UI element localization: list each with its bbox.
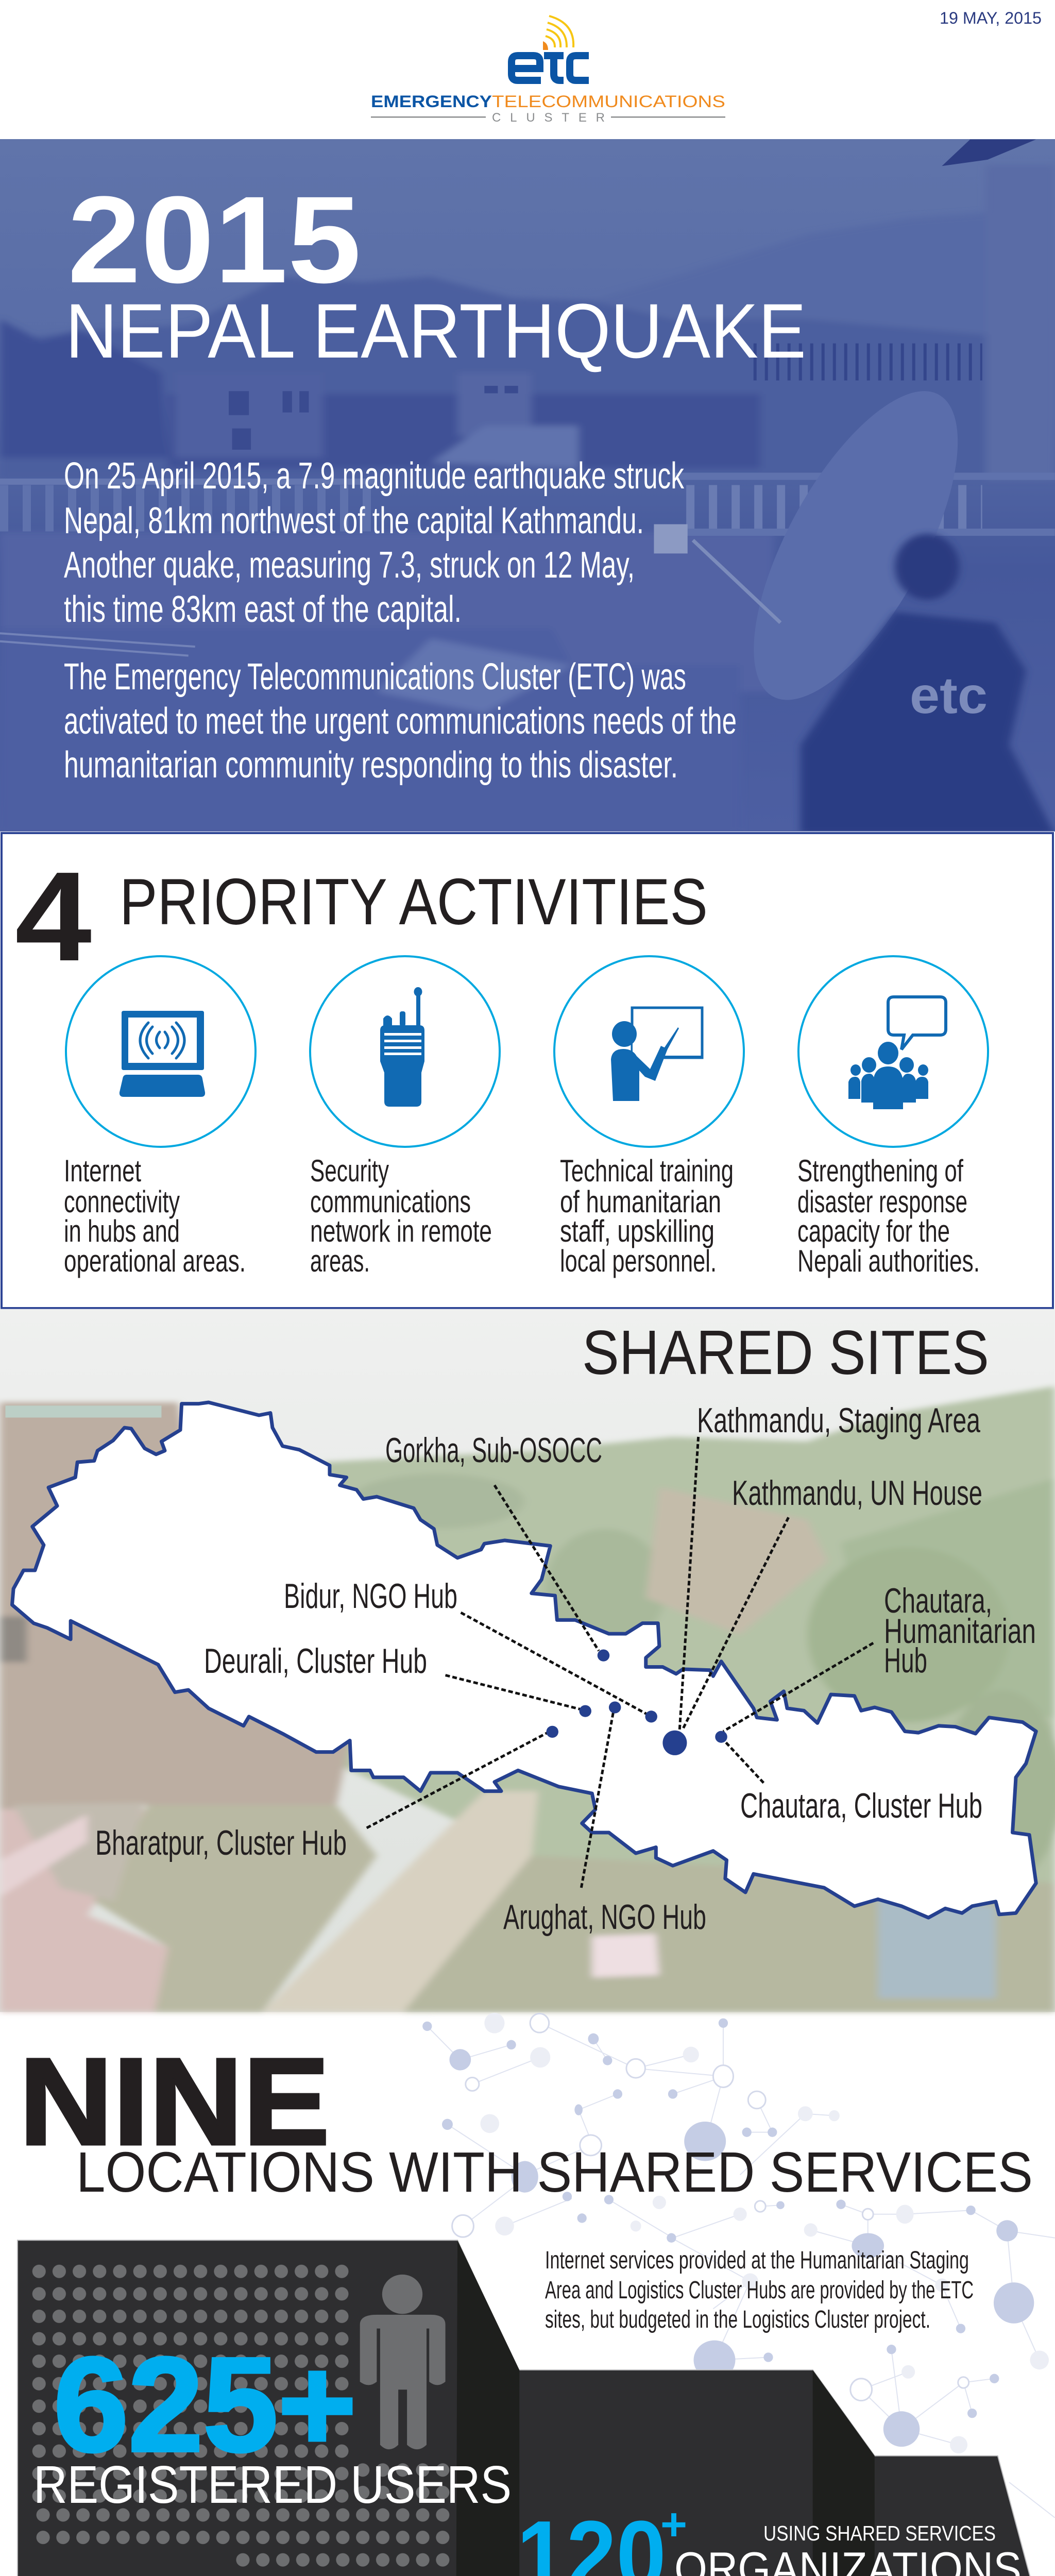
caption: connectivity bbox=[64, 1184, 180, 1219]
hero title: Nepal Earthquake: NEPAL EARTHQUAKE bbox=[65, 287, 806, 374]
hero text: ETC activation: The Emergency Telecommunications Cluster (ETC) was bbox=[64, 656, 686, 698]
panel: hero photo background bbox=[0, 139, 1055, 835]
header: ETC logo bbox=[371, 16, 725, 125]
shared sites heading: SHARED SITES bbox=[582, 1317, 989, 1387]
header: ETC logo: CLUSTER bbox=[492, 111, 605, 125]
caption bbox=[310, 1154, 492, 1278]
header: ETC logo: EMERGENCY bbox=[371, 92, 492, 111]
stat: 625+ registered users: 625+ bbox=[54, 2330, 356, 2480]
stat: 120+ organizations: USING SHARED SERVICES bbox=[763, 2521, 996, 2545]
hero text: earthquake description bbox=[64, 455, 685, 630]
icon: radio handset bbox=[380, 987, 424, 1107]
caption bbox=[560, 1154, 734, 1278]
icon: group with speech bubble bbox=[848, 997, 946, 1109]
panel: hero photo background: etc bbox=[910, 667, 988, 724]
activity 4: disaster response capacity bbox=[797, 956, 988, 1278]
heading number: 4: 4 bbox=[15, 845, 92, 988]
hero text: earthquake description: this time 83km east of the capital. bbox=[64, 589, 462, 630]
caption: disaster response bbox=[797, 1184, 967, 1219]
note: internet services bbox=[545, 2247, 974, 2333]
caption: Technical training bbox=[560, 1154, 734, 1188]
caption: in hubs and bbox=[64, 1214, 180, 1248]
caption: local personnel. bbox=[560, 1244, 717, 1278]
activity 2: security communications bbox=[310, 956, 500, 1278]
map labels: Gorkha, Sub-OSOCC bbox=[385, 1431, 602, 1470]
map labels: Hub bbox=[884, 1641, 927, 1680]
caption: network in remote bbox=[310, 1214, 492, 1248]
stat: 120+ organizations bbox=[517, 2499, 1022, 2576]
icon: teacher at board bbox=[611, 1008, 703, 1101]
map labels: Arughat, NGO Hub bbox=[503, 1897, 706, 1937]
caption: capacity for the bbox=[797, 1214, 950, 1248]
hero text: ETC activation bbox=[64, 656, 737, 786]
caption: staff, upskilling bbox=[560, 1214, 714, 1248]
caption: Strengthening of bbox=[797, 1154, 963, 1188]
heading: priority activities: PRIORITY ACTIVITIES bbox=[120, 865, 708, 938]
icon: computer with signal bbox=[120, 1011, 205, 1097]
map labels: Bharatpur, Cluster Hub bbox=[95, 1823, 347, 1862]
stat: 625+ registered users: REGISTERED USERS bbox=[33, 2455, 512, 2514]
map: Nepal outline with site markers bbox=[12, 1402, 1036, 1918]
caption: communications bbox=[310, 1184, 471, 1219]
heading: NINE: NINE bbox=[19, 2032, 330, 2171]
caption bbox=[797, 1154, 980, 1278]
balustrade bbox=[0, 485, 383, 532]
caption: operational areas. bbox=[64, 1244, 246, 1278]
caption: areas. bbox=[310, 1244, 370, 1278]
map labels: Deurali, Cluster Hub bbox=[204, 1641, 427, 1681]
header: date: 19 MAY, 2015 bbox=[940, 9, 1042, 27]
caption bbox=[64, 1154, 246, 1278]
caption: of humanitarian bbox=[560, 1184, 721, 1219]
site markers bbox=[546, 1650, 727, 1755]
stat: 625+ registered users bbox=[33, 2330, 512, 2514]
hero text: ETC activation: activated to meet the urgent communications needs of the bbox=[64, 701, 737, 742]
caption: Nepali authorities. bbox=[797, 1244, 980, 1278]
caption: Security bbox=[310, 1154, 389, 1188]
hero text: earthquake description: Another quake, measuring 7.3, struck on 12 May, bbox=[64, 545, 635, 586]
map labels bbox=[95, 1401, 1036, 1937]
header: ETC logo: TELECOMMUNICATIONS bbox=[492, 92, 725, 111]
background: network pattern bbox=[422, 2013, 1055, 2518]
activity 3: technical training bbox=[554, 956, 744, 1278]
panel: shared sites photo background bbox=[0, 1309, 1055, 2012]
activity 1: internet connectivity bbox=[64, 956, 256, 1278]
icon: person bbox=[360, 2275, 446, 2449]
stepped dark block with user dots and person bbox=[18, 2240, 1040, 2576]
caption: Internet bbox=[64, 1154, 141, 1188]
stat: 120+ organizations: + bbox=[660, 2499, 687, 2550]
hero text: earthquake description: Nepal, 81km northwest of the capital Kathmandu. bbox=[64, 500, 644, 541]
map labels: Bidur, NGO Hub bbox=[284, 1577, 457, 1616]
hero title: 2015: 2015 bbox=[67, 171, 361, 309]
panel: priority activities bbox=[2, 833, 1053, 1308]
hero text: ETC activation: humanitarian community responding to this disaster. bbox=[64, 744, 678, 786]
dashed connector lines bbox=[367, 1437, 873, 1888]
map labels: Chautara, bbox=[884, 1581, 992, 1620]
hero text: earthquake description: On 25 April 2015, a 7.9 magnitude earthquake struck bbox=[64, 455, 685, 497]
map outline bbox=[12, 1402, 1036, 1918]
